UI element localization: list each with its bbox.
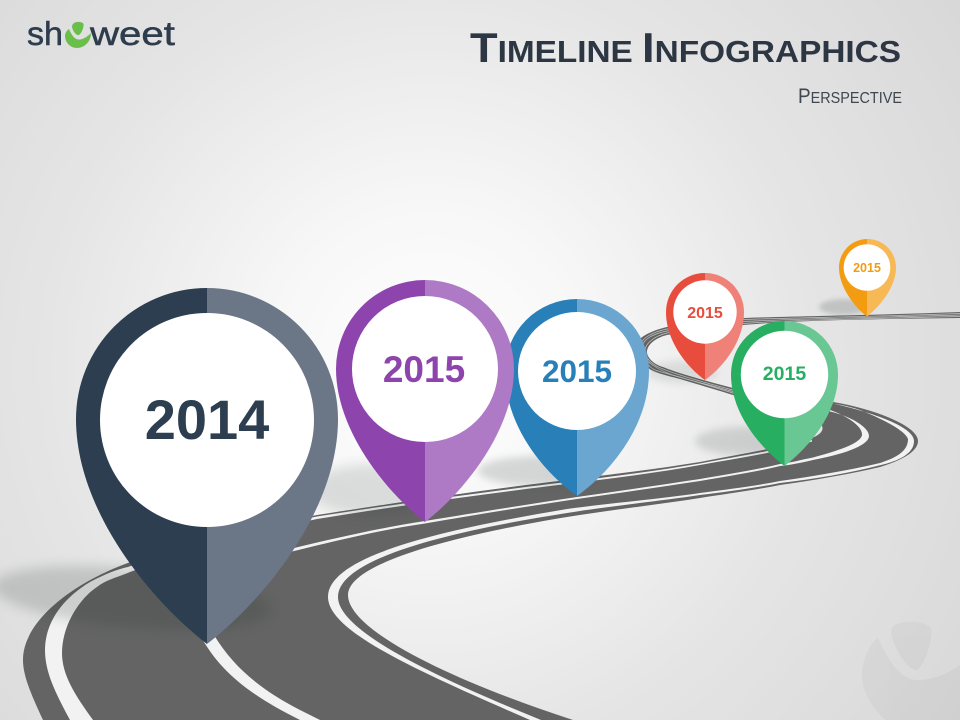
logo: showeet: weet [89,15,175,52]
pin: 2015 green [731,321,838,466]
subtitle: PERSPECTIVE [798,85,902,108]
pin: 2015 orange [839,239,896,316]
pin: 2015 purple [336,280,514,522]
pin: 2014 navy: 2014 [145,388,269,451]
pin: 2015 orange: 2015 [853,261,881,275]
lane line: outer left [45,440,812,720]
road surface [23,312,960,720]
distant lane lines [640,314,960,420]
centre line: far [290,410,869,552]
pin: 2015 blue: 2015 [542,353,612,389]
lane line: outer right [328,403,914,720]
logo: showeet [27,15,175,52]
pin: 2015 red [666,273,744,380]
centre line: near [200,635,340,720]
pin shadows [0,299,867,640]
pin: 2015 purple: 2015 [383,349,465,390]
pin: 2015 blue [505,299,649,496]
logo: showeet: sh [27,15,63,52]
pin: 2015 green: 2015 [763,363,806,385]
road [23,312,960,720]
pin: 2015 red: 2015 [687,305,723,322]
pin: 2014 navy [76,288,338,644]
title: TIMELINE INFOGRAPHICS [470,24,901,71]
watermark logo [862,622,960,720]
